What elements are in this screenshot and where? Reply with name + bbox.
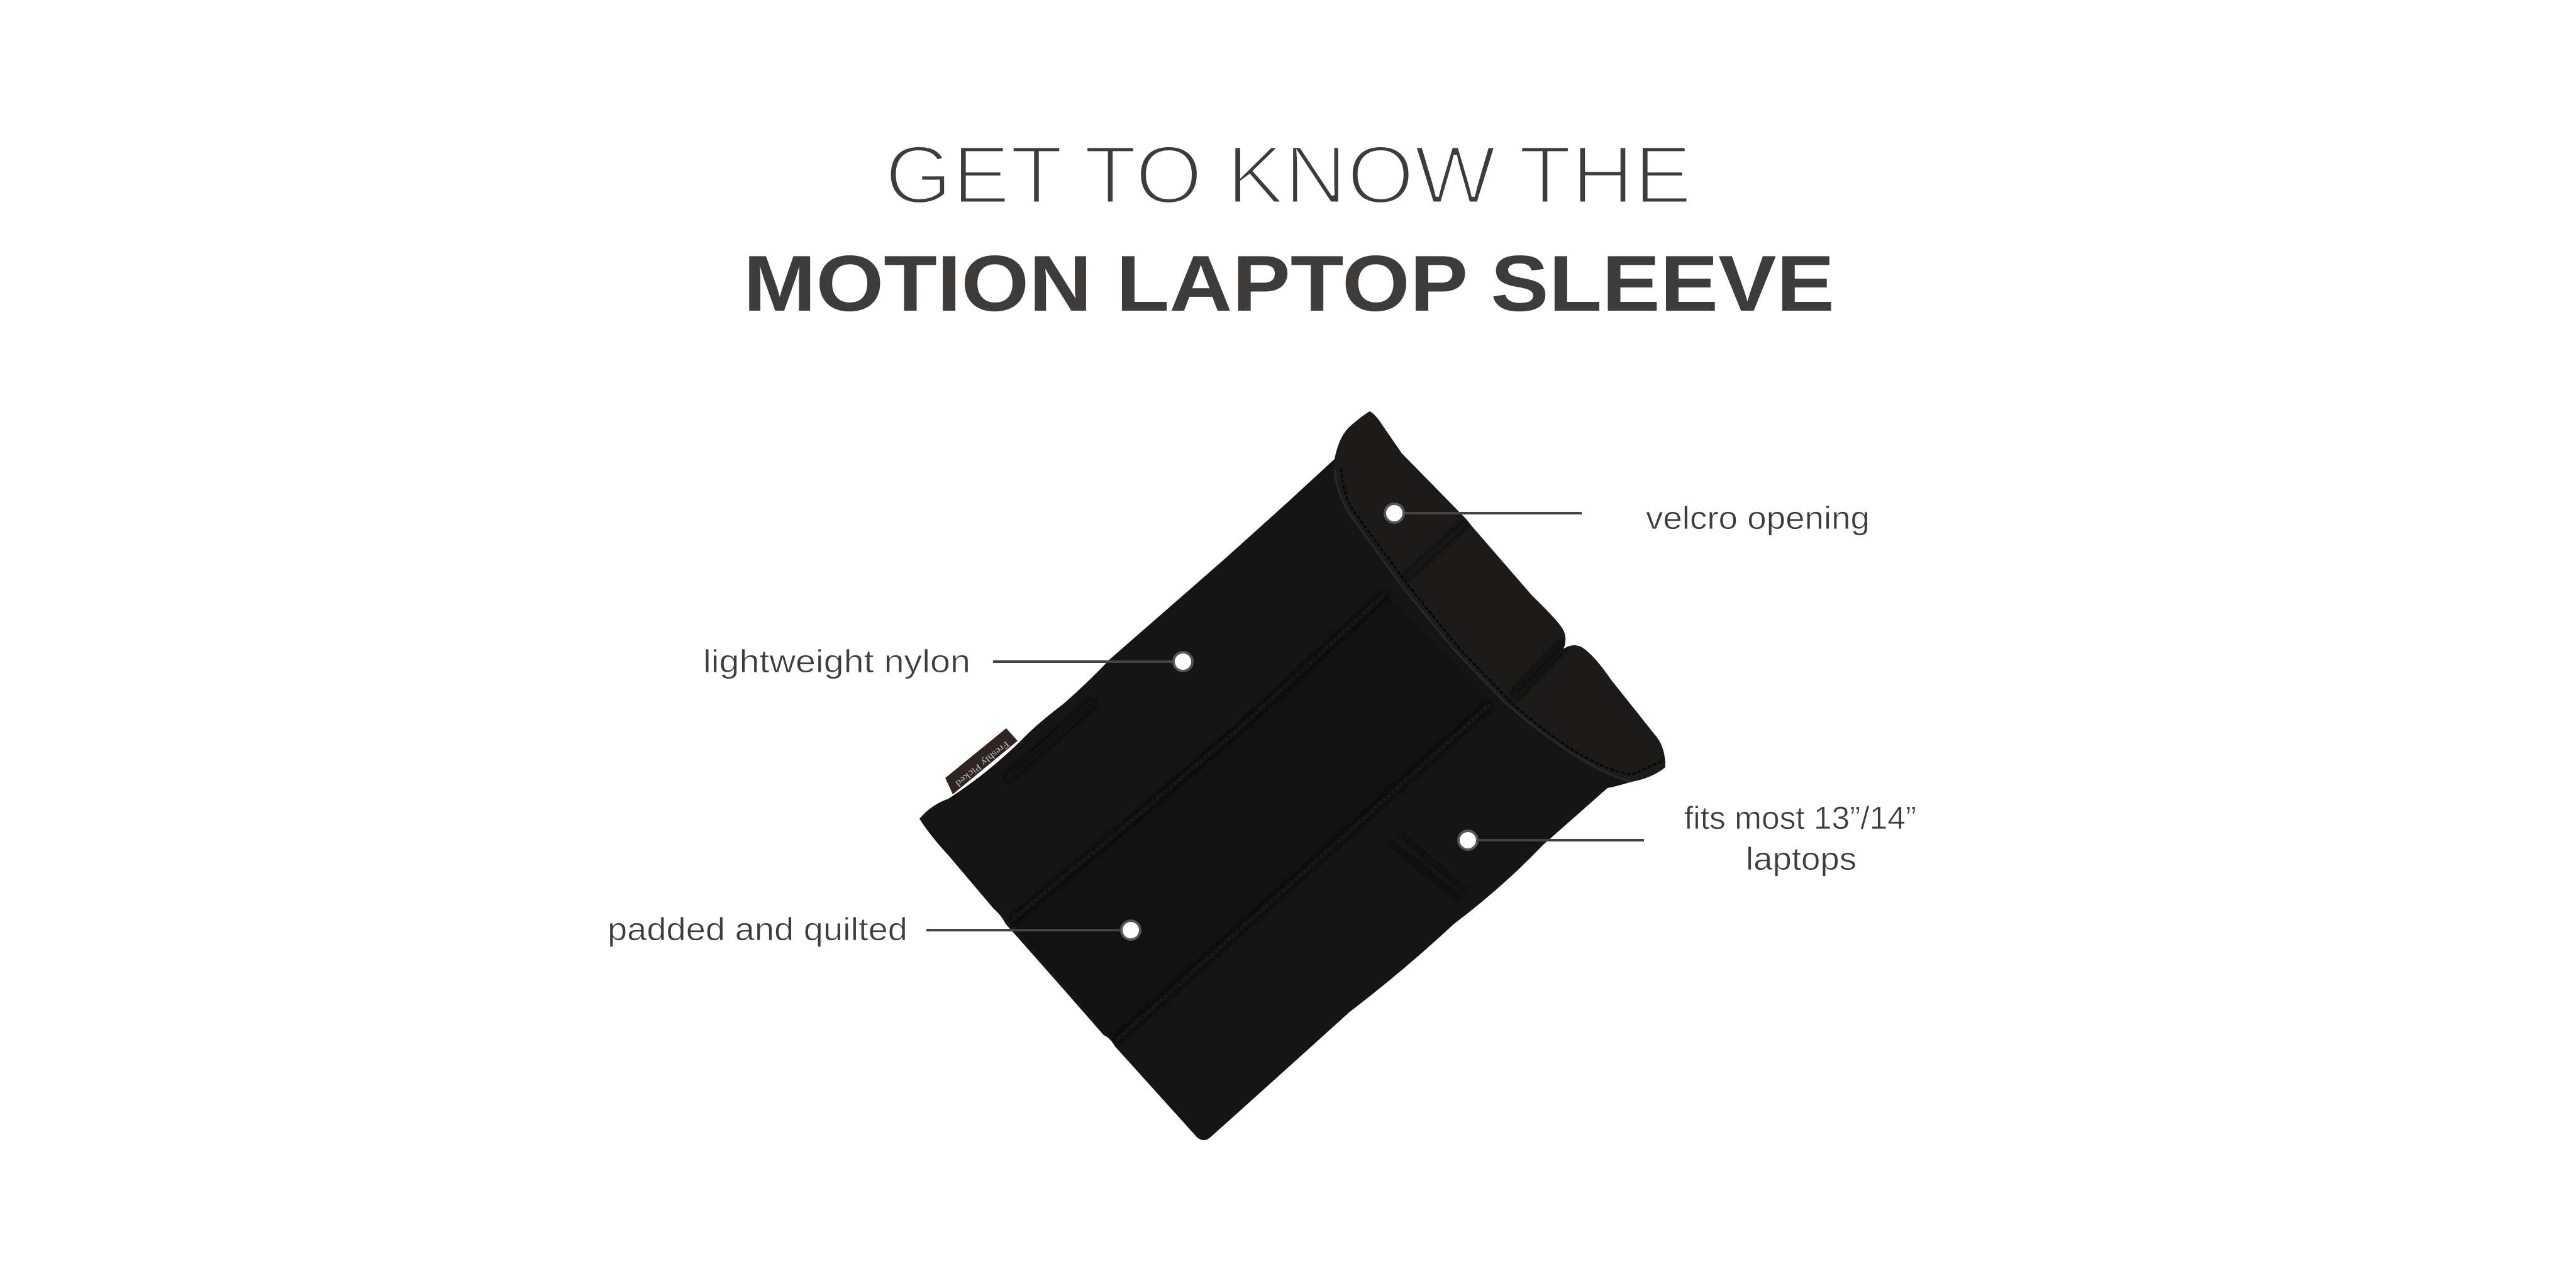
callout: lightweight nylon	[703, 643, 1192, 679]
callout: velcro opening: velcro opening	[1646, 500, 1870, 536]
callout: padded and quilted	[608, 911, 1140, 947]
callout: velcro opening	[1385, 500, 1870, 536]
callout: fits most laptops	[1458, 800, 1916, 877]
brand tag: Freshly Picked	[953, 739, 1011, 789]
flap creases and stitching	[1341, 469, 1665, 775]
quilting seams and creases	[1006, 593, 1491, 1041]
flap edge	[1335, 469, 1631, 782]
title line 1: GET TO KNOW THE	[885, 128, 1692, 221]
callout: fits most laptops: fits most 13”/14”	[1684, 800, 1916, 836]
callout: lightweight nylon: lightweight nylon	[703, 643, 970, 679]
brand tag	[945, 728, 1018, 794]
velcro flap	[1335, 411, 1665, 782]
title line 2: MOTION LAPTOP SLEEVE	[743, 239, 1835, 328]
sleeve body	[919, 411, 1665, 1140]
callout: padded and quilted: padded and quilted	[608, 911, 908, 947]
product photo: quilted laptop sleeve	[919, 411, 1665, 1140]
callout: fits most laptops: laptops	[1746, 841, 1857, 877]
infographic canvas	[610, 147, 1915, 1140]
